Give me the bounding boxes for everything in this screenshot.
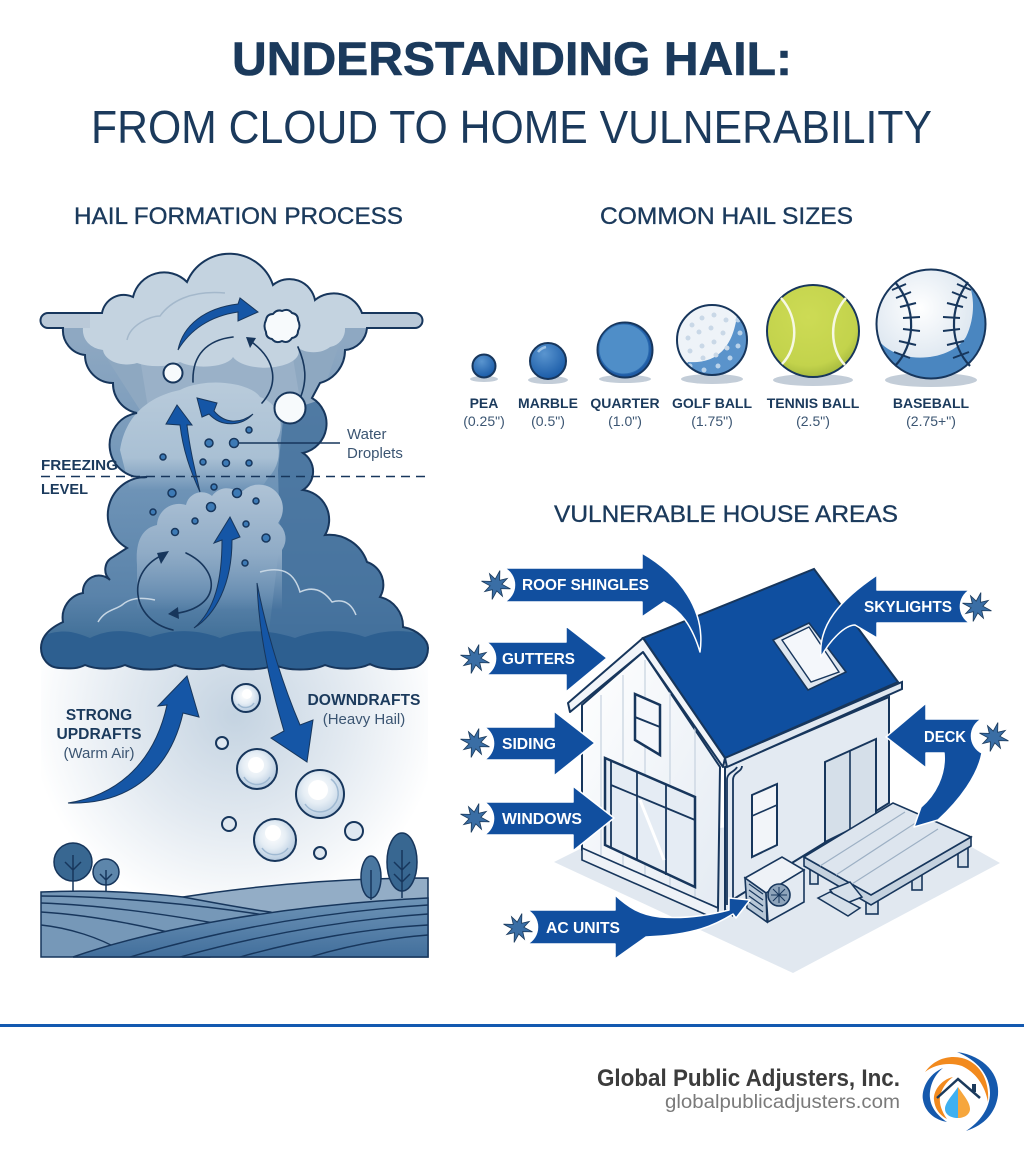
- gable wall: [582, 652, 720, 920]
- landscape with fields and trees: [41, 833, 428, 957]
- arrow: gutters: GUTTERS: [502, 651, 575, 668]
- baseball: BASEBALL: [893, 395, 970, 411]
- deck steps: [818, 882, 862, 916]
- footer rule: [0, 1024, 1024, 1027]
- label: downdrafts: DOWNDRAFTS: [308, 692, 420, 709]
- arrow: deck: [886, 703, 1012, 827]
- arrow: roof shingles: [478, 553, 701, 652]
- arrow: upward flow: [166, 405, 200, 492]
- golf ball: [672, 305, 752, 429]
- panel: vulnerable house diagram: [457, 553, 1012, 973]
- arrow: inner circulation thin lines: [193, 337, 305, 403]
- arrow: gutters: [457, 626, 607, 692]
- arrow: deck: DECK: [924, 729, 967, 746]
- label: downdrafts: (Heavy Hail): [323, 711, 405, 728]
- freezing level label and dashed line: [41, 457, 431, 498]
- arrow: skylights: [821, 575, 995, 657]
- label: strong updrafts: UPDRAFTS: [56, 726, 142, 743]
- arrow: lower updraft: [194, 517, 240, 628]
- sliding door: [825, 739, 876, 842]
- house: [568, 569, 902, 920]
- heading: hail formation process: HAIL FORMATION PROCESS: [74, 203, 403, 230]
- arrow: strong updrafts: [68, 676, 199, 803]
- arrow: downdrafts: [257, 583, 313, 762]
- arrow: circulation loop: [138, 551, 211, 630]
- panel: hail formation diagram: [30, 250, 440, 957]
- marble: (0.5"): [531, 413, 565, 429]
- trees: [54, 833, 417, 900]
- callout: water droplets: Water: [347, 426, 386, 443]
- freezing level label and dashed line: FREEZING: [41, 457, 118, 474]
- arrow: AC units: [500, 895, 750, 959]
- quarter: QUARTER: [590, 395, 660, 411]
- gable trim: [568, 638, 725, 767]
- arrow: siding: [457, 711, 595, 776]
- footer company name: [597, 1065, 900, 1113]
- pea: PEA: [470, 395, 498, 411]
- title: FROM CLOUD TO HOME VULNERABILITY: [91, 101, 932, 153]
- heading: common hail sizes: COMMON HAIL SIZES: [600, 203, 853, 230]
- upper window: [635, 694, 660, 755]
- arrow: windows: WINDOWS: [502, 811, 582, 828]
- arrow: siding: SIDING: [502, 736, 556, 753]
- golf ball: GOLF BALL: [672, 395, 752, 411]
- big window: [605, 758, 695, 887]
- tennis ball: [767, 285, 860, 429]
- arrow: skylights: SKYLIGHTS: [864, 599, 952, 616]
- title: [91, 32, 932, 153]
- freezing level label and dashed line: LEVEL: [41, 481, 88, 498]
- marble: [518, 343, 578, 429]
- baseball: [876, 268, 986, 429]
- arrow: roof shingles: ROOF SHINGLES: [522, 577, 649, 594]
- pea: [463, 354, 505, 429]
- roof: [643, 569, 898, 758]
- marble: MARBLE: [518, 395, 578, 411]
- footer company name: globalpublicadjusters.com: [665, 1092, 900, 1113]
- tennis ball: TENNIS BALL: [767, 395, 860, 411]
- pea: (0.25"): [463, 413, 505, 429]
- gutter: [725, 682, 902, 767]
- title: UNDERSTANDING HAIL:: [232, 32, 792, 85]
- panel: hail size comparison: [463, 270, 1000, 429]
- deck: [804, 803, 971, 916]
- golf ball: (1.75"): [691, 413, 733, 429]
- label: strong updrafts: (Warm Air): [63, 745, 135, 762]
- small window: [752, 784, 777, 857]
- arrow: windows: [457, 786, 614, 851]
- quarter: (1.0"): [608, 413, 642, 429]
- sky background: [41, 650, 428, 900]
- storm cloud: [30, 250, 440, 680]
- arrow: AC units: AC UNITS: [546, 920, 620, 937]
- ground shadow: [554, 803, 1000, 973]
- footer company name: Global Public Adjusters, Inc.: [597, 1065, 900, 1092]
- icon: company logo: [923, 1052, 998, 1131]
- arrow: return flow: [197, 398, 253, 424]
- tennis ball: (2.5"): [796, 413, 830, 429]
- callout: water droplets: [238, 426, 403, 462]
- quarter: [590, 322, 660, 429]
- falling hailstones: [216, 684, 363, 861]
- baseball: (2.75+"): [906, 413, 956, 429]
- label: downdrafts: [308, 692, 420, 728]
- right wall: [725, 697, 889, 915]
- label: strong updrafts: STRONG: [66, 707, 132, 724]
- callout: water droplets: Droplets: [347, 445, 403, 462]
- AC unit: [745, 857, 804, 922]
- water droplets: [150, 427, 270, 566]
- hailstones in cloud: [164, 310, 306, 424]
- skylight: [773, 623, 846, 690]
- label: strong updrafts: [56, 707, 142, 762]
- downspout: [727, 766, 742, 905]
- heading: vulnerable house areas: VULNERABLE HOUSE AREAS: [554, 501, 898, 528]
- arrow: top circulation: [178, 298, 258, 350]
